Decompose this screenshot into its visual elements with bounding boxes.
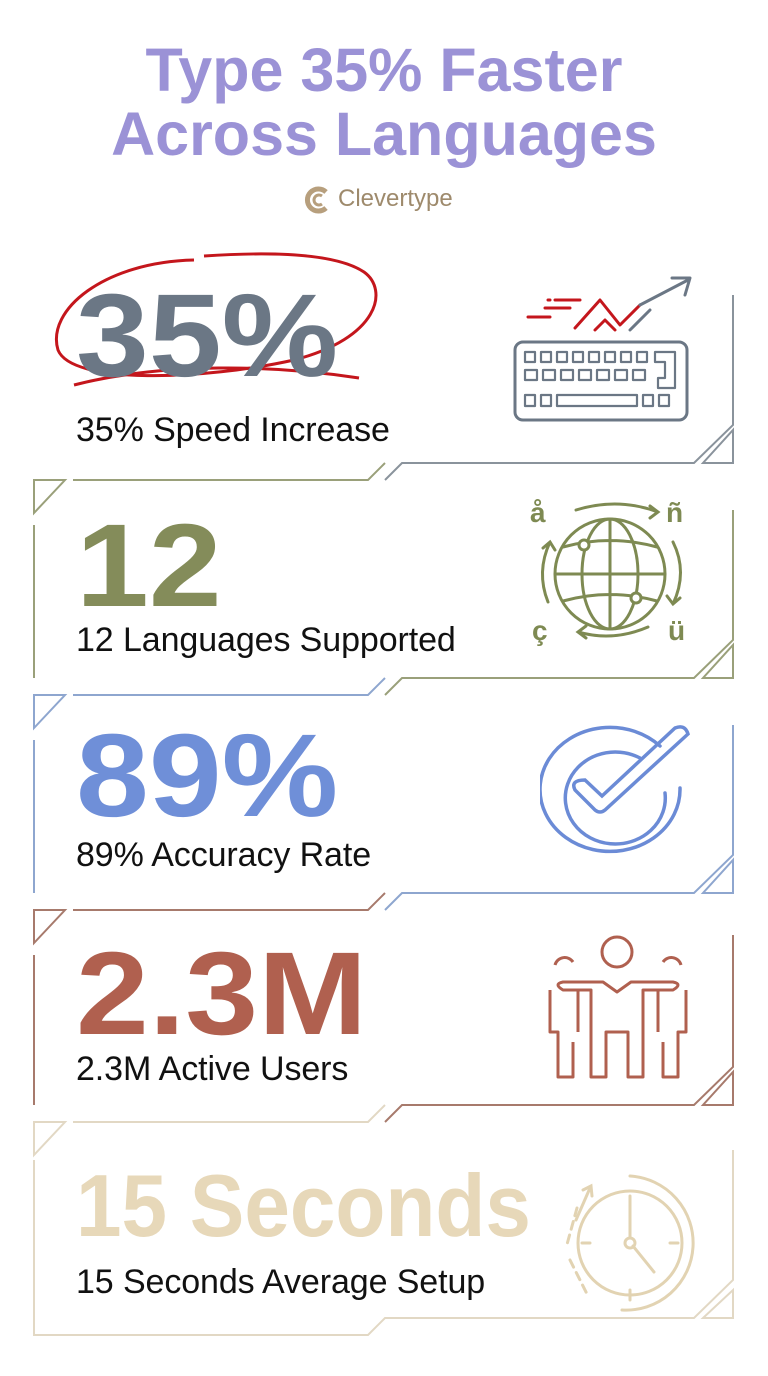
- big number: 12: 12: [76, 500, 222, 632]
- label: users: 2.3M Active Users: [76, 1050, 348, 1088]
- brand name: Clevertype: [338, 185, 453, 212]
- icon: check target: [540, 725, 690, 854]
- label: speed: 35% Speed Increase: [76, 411, 390, 449]
- icon: globe with letters: å: [530, 497, 546, 528]
- big number: 15 Seconds: 15 Seconds: [76, 1156, 531, 1255]
- icon: clock: [566, 1174, 695, 1312]
- label: accuracy: 89% Accuracy Rate: [76, 836, 371, 874]
- icon: globe with letters: [530, 497, 685, 646]
- big number: 89%: 89%: [76, 710, 338, 842]
- icon: keyboard with arrow: [514, 276, 692, 422]
- icon: three people: [548, 936, 688, 1078]
- icon: globe with letters: ñ: [666, 497, 683, 528]
- big number: 2.3M: 2.3M: [76, 928, 367, 1060]
- title: [111, 36, 657, 168]
- icon: logo mark: [304, 186, 328, 214]
- red circle annotation: [54, 252, 378, 386]
- icon: globe with letters: ç: [532, 615, 548, 646]
- label: languages: 12 Languages Supported: [76, 621, 456, 659]
- title: Across Languages: [111, 100, 657, 168]
- logo: [304, 185, 453, 214]
- title: Type 35% Faster: [146, 36, 622, 104]
- label: setup: 15 Seconds Average Setup: [76, 1263, 485, 1301]
- panel: speed: [54, 252, 378, 386]
- icon: globe with letters: ü: [668, 615, 685, 646]
- big number: 35%: 35%: [76, 270, 338, 402]
